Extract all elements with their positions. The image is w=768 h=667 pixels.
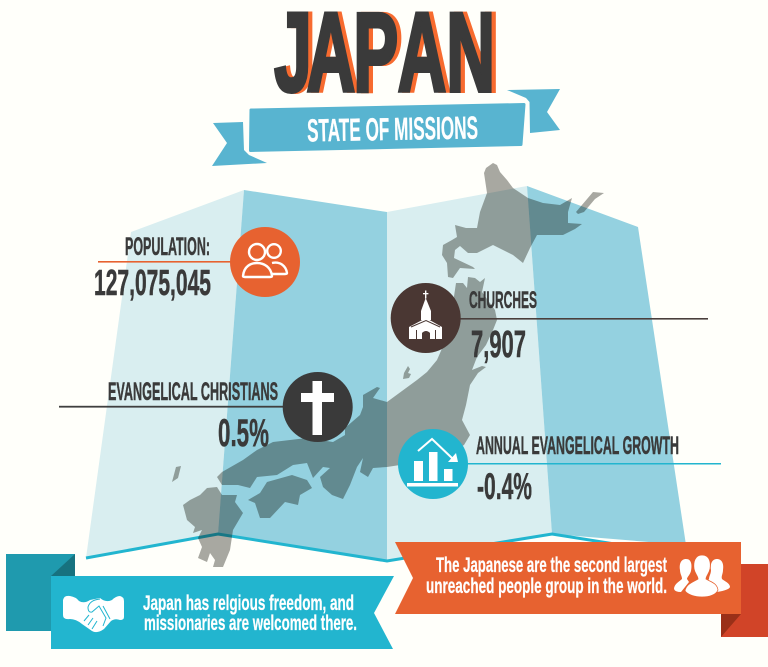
ribbon	[212, 89, 560, 166]
stat: population	[94, 227, 300, 303]
ribbon text: STATE OF MISSIONS	[307, 110, 478, 148]
stat: annual evangelical growth	[398, 429, 721, 507]
evangelical value: 0.5%	[218, 412, 269, 455]
Tsushima island	[172, 466, 181, 482]
Shikoku	[248, 475, 312, 518]
stat: population: POPULATION:	[125, 233, 210, 261]
churches line	[455, 318, 708, 320]
line 1: Japan has relgious freedom, and	[143, 592, 354, 615]
banner fold	[721, 614, 741, 637]
banner front	[395, 542, 741, 614]
banner back	[721, 564, 768, 637]
Hokkaido	[442, 163, 582, 278]
map panel 3	[387, 186, 552, 561]
banner text	[426, 554, 667, 598]
ribbon right tail	[507, 89, 560, 133]
callout: unreached people group	[395, 542, 768, 637]
icon: handshake	[63, 596, 124, 632]
icon: declining bar chart	[398, 429, 468, 499]
banner back	[6, 554, 75, 631]
icon: group of people	[674, 555, 730, 597]
Kyushu	[183, 487, 243, 567]
map of Japan	[172, 163, 604, 567]
stat: churches	[391, 283, 708, 366]
icon: cross	[283, 372, 353, 442]
map panel 2	[218, 190, 387, 561]
population value: 127,075,045	[94, 262, 211, 303]
growth value: -0.4%	[477, 466, 532, 507]
population line	[98, 261, 238, 263]
evangelical line	[59, 406, 289, 408]
Sado island	[403, 366, 411, 379]
ribbon left tail	[212, 122, 267, 166]
banner front	[51, 576, 394, 649]
line 2: missionaries are welcomed there.	[144, 612, 357, 635]
icon: church	[391, 283, 461, 353]
map panel 1	[86, 190, 244, 558]
ribbon body	[250, 104, 524, 150]
icon: people outline	[230, 227, 300, 297]
callout: religious freedom	[6, 554, 394, 649]
folded map	[86, 186, 686, 561]
banner text	[143, 592, 357, 635]
map panel 4	[527, 186, 686, 545]
Honshu	[217, 277, 497, 499]
title	[274, 0, 499, 115]
banner fold	[51, 554, 75, 576]
evangelical label: EVANGELICAL CHRISTIANS	[108, 378, 278, 406]
Kuril island	[576, 192, 604, 214]
churches value: 7,907	[471, 324, 526, 366]
stat: evangelical christians	[59, 372, 353, 455]
growth line	[460, 463, 721, 464]
map bottom edge	[86, 534, 640, 561]
stat: churches: CHURCHES	[469, 287, 537, 314]
